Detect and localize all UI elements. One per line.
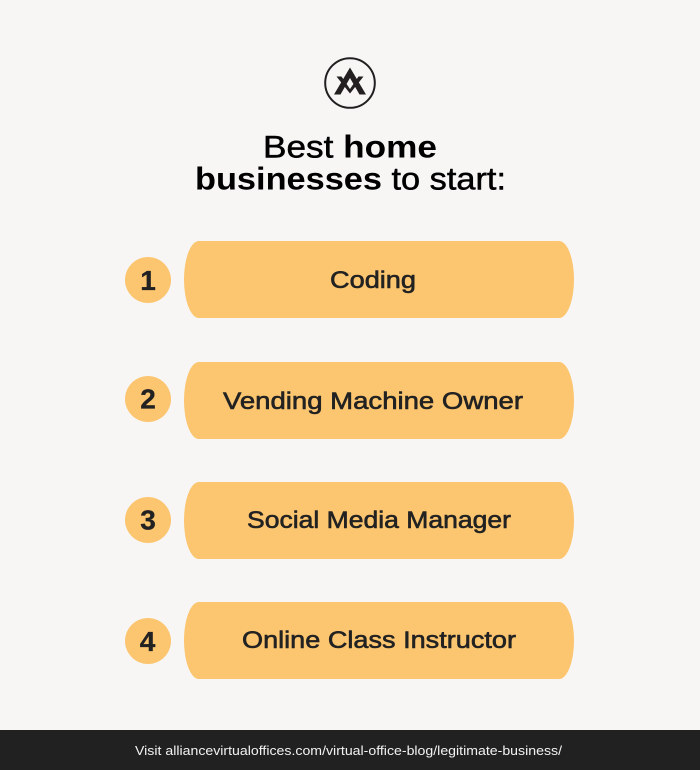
title (195, 128, 506, 196)
item 2: Vending Machine Owner (125, 362, 574, 439)
pill: Vending Machine Owner (184, 362, 574, 439)
icon: logo (325, 58, 375, 108)
footer bar: Visit alliancevirtualoffices.com/virtual-office-blog/legitimate-business/ (135, 743, 562, 758)
pill: Online Class Instructor (184, 602, 574, 679)
pill: Vending Machine Owner: Vending Machine Owner (223, 388, 523, 415)
pill: Coding: Coding (330, 267, 416, 294)
title: businesses to start: (195, 160, 506, 196)
number badge 3 (125, 497, 171, 543)
number badge 4 (125, 618, 171, 664)
pill: Social Media Manager: Social Media Manager (247, 507, 511, 534)
number badge 2: 2 (140, 384, 156, 414)
item 3: Social Media Manager (125, 482, 574, 559)
number badge 1: 1 (140, 265, 156, 296)
number badge 3: 3 (140, 504, 156, 536)
footer bar (0, 730, 700, 770)
number badge 4: 4 (140, 626, 156, 657)
item 4: Online Class Instructor (125, 602, 574, 679)
pill: Coding (184, 241, 574, 318)
pill: Social Media Manager (184, 482, 574, 559)
item 1: Coding (125, 241, 574, 318)
title: Best home (263, 128, 437, 164)
number badge 2 (125, 376, 171, 422)
pill: Online Class Instructor: Online Class Instructor (242, 627, 516, 654)
number badge 1 (125, 257, 171, 303)
